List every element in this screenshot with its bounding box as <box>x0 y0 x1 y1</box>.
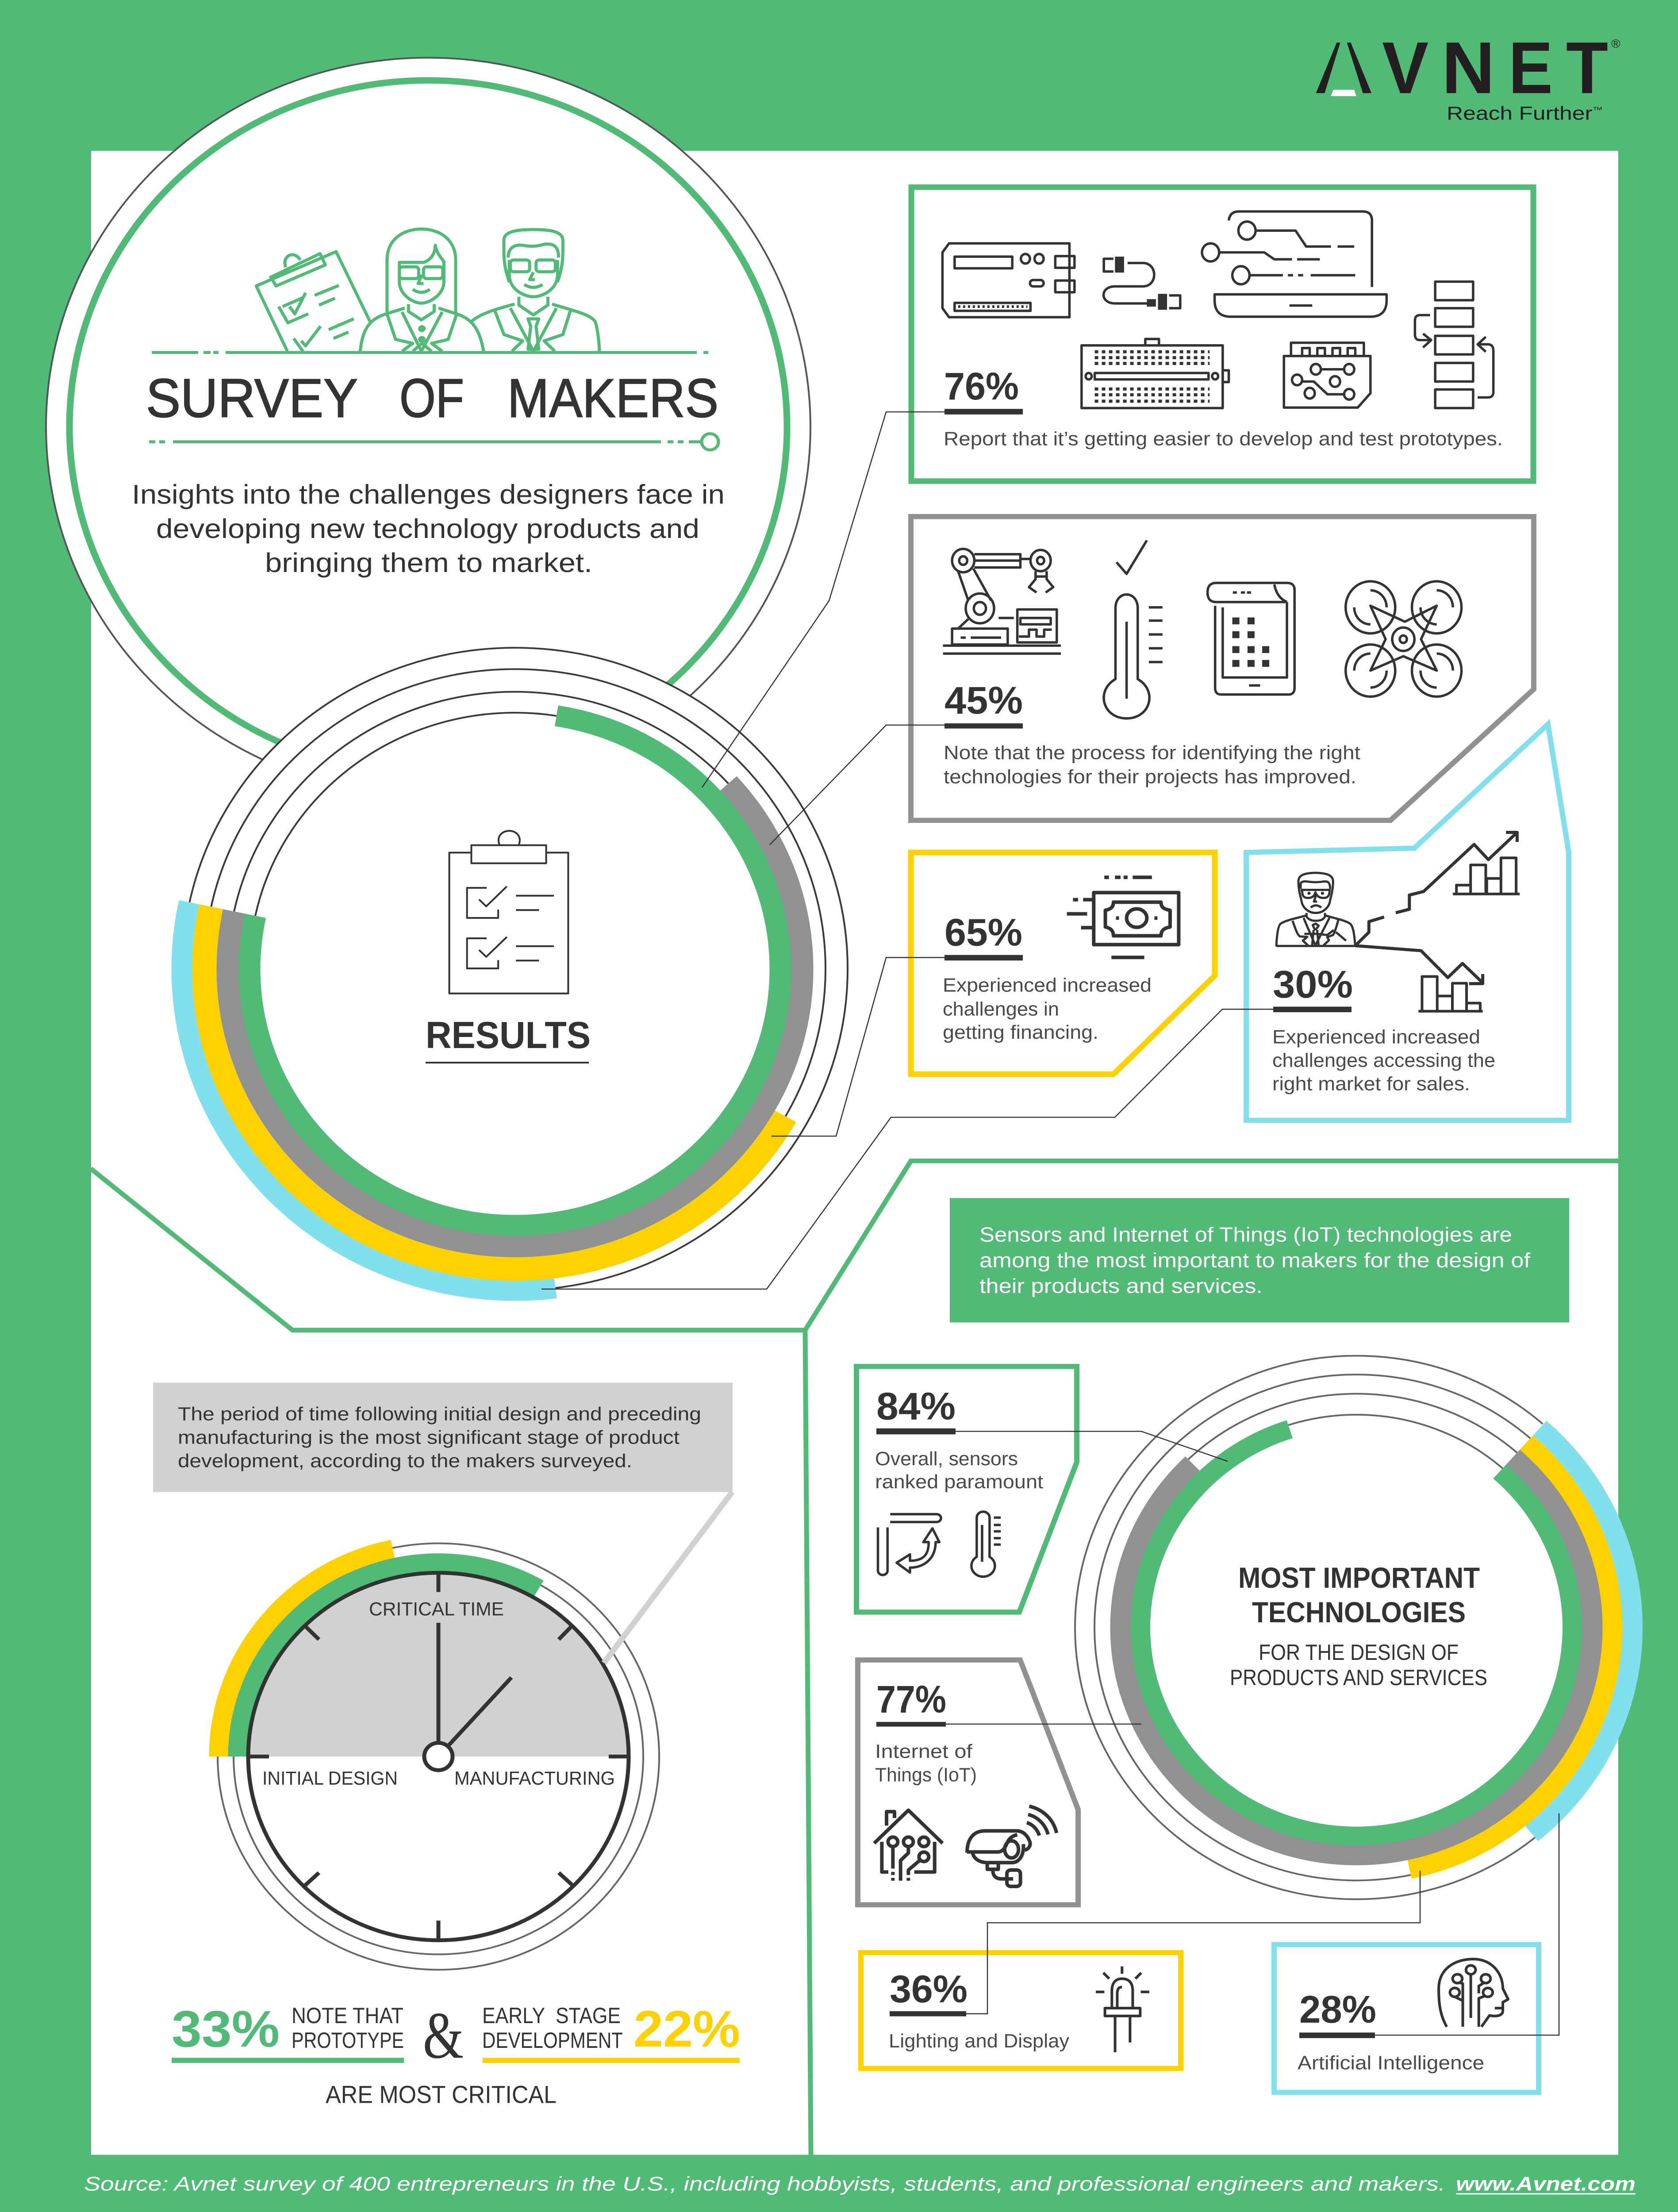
intro text: bringing them to market. <box>265 548 592 578</box>
panel: intro circle <box>46 58 810 796</box>
callout tail <box>604 1492 732 1663</box>
intro text <box>132 480 725 578</box>
callout: critical time text <box>153 1382 733 1492</box>
icon: makers with clipboard <box>256 229 599 351</box>
callout: critical time text: development, according to the makers surveyed. <box>178 1451 632 1471</box>
icons: smart home and camera <box>874 1806 1056 1886</box>
chart: critical time clock <box>218 1492 732 1970</box>
description <box>875 1448 1043 1493</box>
ring heading <box>1230 1562 1487 1690</box>
leader lines to technologies ring <box>946 1431 1559 2035</box>
description: Things (IoT) <box>875 1764 977 1786</box>
source footer: www.Avnet.com <box>1456 2173 1636 2195</box>
stat: 36%: 36% <box>890 1967 968 2010</box>
stat: 28%: 28% <box>1299 1988 1376 2031</box>
stat: 76%: 76% <box>944 365 1019 408</box>
ampersand: & <box>423 1999 464 2073</box>
icon: LED <box>1096 1966 1149 2052</box>
stat: 22% early stage development <box>482 2000 740 2063</box>
stat: 22% early stage development: 22% <box>634 2000 740 2058</box>
icons: boards, cable, laptop, flowchart <box>942 211 1494 408</box>
description: Report that it’s getting easier to develop and test prototypes. <box>944 428 1503 449</box>
icons: robot arm, thermometer, tablet, drone <box>943 541 1462 718</box>
icon: AI head <box>1439 1959 1508 2027</box>
description <box>875 1741 977 1786</box>
ring heading: MOST IMPORTANT <box>1238 1562 1480 1594</box>
clock labels: MANUFACTURING <box>454 1768 615 1789</box>
ring heading: FOR THE DESIGN OF <box>1259 1640 1459 1665</box>
logo: ® <box>1611 37 1620 50</box>
divider line above title <box>152 351 708 354</box>
clock labels: INITIAL DESIGN <box>262 1768 398 1789</box>
logo: ™ <box>1593 105 1603 115</box>
description: Lighting and Display <box>889 2031 1070 2052</box>
clock labels <box>262 1599 615 1789</box>
stat: 33% note that prototype <box>172 2000 404 2063</box>
callout: sensors and IoT: among the most important to makers for the design of <box>979 1248 1531 1271</box>
description: getting financing. <box>943 1022 1098 1043</box>
results heading: RESULTS <box>426 1014 591 1056</box>
callout: sensors and IoT: Sensors and Internet of Things (IoT) technologies are <box>979 1223 1512 1246</box>
leader lines from results ring <box>541 412 1273 1289</box>
logo: T <box>1566 27 1608 109</box>
stat: 30%: 30% <box>1273 963 1353 1006</box>
stat: 77%: 77% <box>876 1678 946 1721</box>
description <box>944 742 1360 787</box>
logo: E <box>1509 27 1553 109</box>
chart: results ring <box>182 648 848 1290</box>
title: MAKERS <box>507 368 718 429</box>
intro text: developing new technology products and <box>156 514 699 544</box>
logo: N <box>1442 27 1495 109</box>
panel: 45% technologies <box>911 517 1534 820</box>
panel: 30% market access <box>1246 724 1569 1120</box>
icon: rising and falling charts <box>1355 832 1520 1011</box>
description: Artificial Intelligence <box>1298 2052 1484 2074</box>
stat: 33% note that prototype: PROTOTYPE <box>292 2028 404 2053</box>
panel: 65% financing <box>911 853 1215 1074</box>
icon: results clipboard <box>449 831 568 994</box>
panel: 76% prototypes <box>911 187 1533 481</box>
stat: 22% early stage development: EARLY STAGE <box>482 2003 621 2028</box>
title: OF <box>399 368 464 429</box>
chart: most important technologies ring <box>1075 1356 1638 1899</box>
icon: worried maker <box>1276 873 1355 946</box>
intro text: Insights into the challenges designers face in <box>132 480 725 510</box>
description: right market for sales. <box>1272 1073 1470 1095</box>
stat: 22% early stage development: DEVELOPMENT <box>482 2028 623 2053</box>
title: SURVEY <box>146 368 358 429</box>
logo: V <box>1382 27 1428 109</box>
description: Experienced increased <box>1272 1026 1480 1048</box>
divider line below title <box>149 434 718 450</box>
stat: 65%: 65% <box>945 911 1022 954</box>
ring heading: TECHNOLOGIES <box>1252 1596 1466 1629</box>
callout: sensors and IoT: their products and services. <box>979 1274 1263 1297</box>
ring heading: PRODUCTS AND SERVICES <box>1230 1665 1487 1690</box>
description: Internet of <box>875 1741 973 1762</box>
panel: 28% artificial intelligence <box>1274 1944 1539 2093</box>
panel: 77% internet of things <box>858 1660 1078 1905</box>
logo: A <box>1314 27 1374 109</box>
conclusion text: ARE MOST CRITICAL <box>326 2081 557 2108</box>
callout: critical time text: manufacturing is the most significant stage of product <box>178 1427 680 1448</box>
callout: sensors and IoT <box>950 1198 1569 1322</box>
clock labels: CRITICAL TIME <box>369 1599 504 1620</box>
description <box>943 975 1152 1043</box>
stat: 33% note that prototype: NOTE THAT <box>292 2003 403 2028</box>
panel: 36% lighting and display <box>861 1953 1181 2068</box>
panel: 84% sensors <box>856 1367 1077 1612</box>
description: technologies for their projects has improved. <box>944 766 1356 787</box>
logo <box>1314 27 1620 124</box>
stat: 45%: 45% <box>945 679 1023 722</box>
clock ticks and hands <box>248 1573 629 1940</box>
description <box>1272 1026 1495 1095</box>
description: Overall, sensors <box>875 1448 1018 1470</box>
description: Note that the process for identifying the right <box>944 742 1360 764</box>
description: challenges in <box>943 998 1059 1020</box>
source footer: Source: Avnet survey of 400 entrepreneurs in the U.S., including hobbyists, students, and professional engineers and makers. <box>84 2173 1445 2195</box>
stat: 33% note that prototype: 33% <box>172 2000 280 2058</box>
divider lines between sections <box>91 1161 1618 2155</box>
description: challenges accessing the <box>1272 1050 1495 1071</box>
icon: banknote <box>1067 877 1179 957</box>
icons: sensor and thermometer <box>878 1512 1001 1577</box>
description: Experienced increased <box>943 975 1152 996</box>
callout: critical time text: The period of time following initial design and preceding <box>178 1404 701 1425</box>
logo: Reach Further <box>1447 103 1571 124</box>
stat: 84%: 84% <box>876 1385 956 1428</box>
description: ranked paramount <box>875 1471 1043 1493</box>
